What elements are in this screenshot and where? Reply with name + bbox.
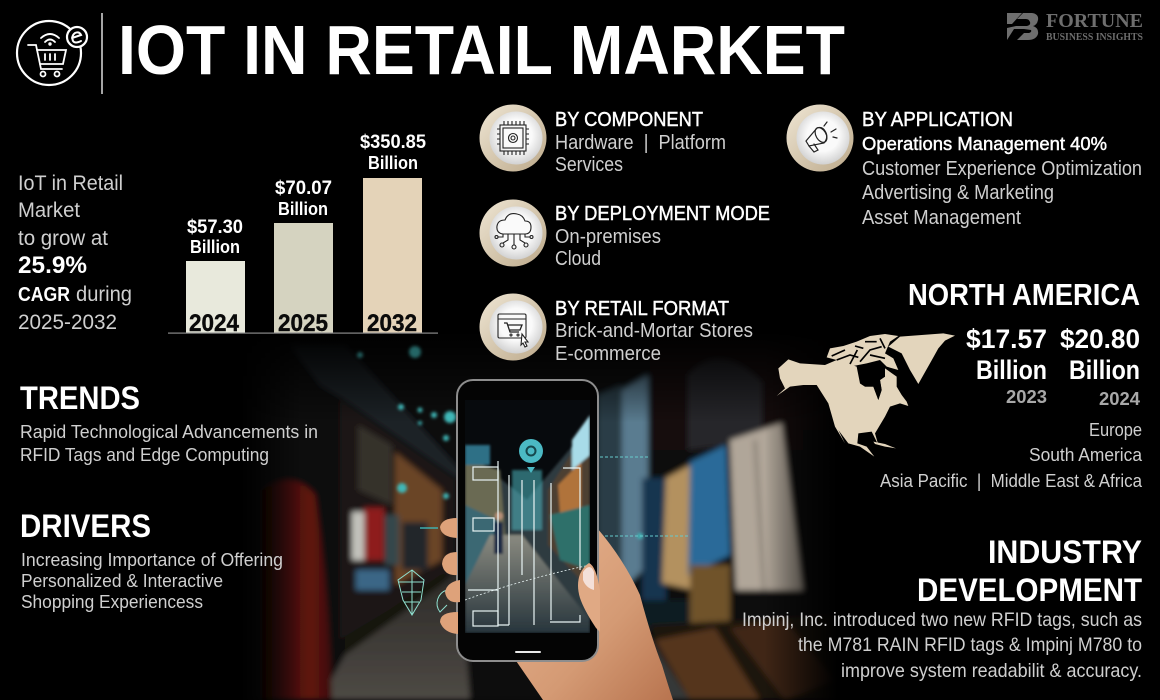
segment: by application: Operations Management 40%: [862, 133, 1107, 154]
market value 2024: [1060, 324, 1140, 409]
drivers: Increasing Importance of Offering: [21, 550, 283, 570]
phone home bar: [515, 651, 541, 653]
segment: by component: Hardware | Platform: [555, 132, 726, 154]
CAGR text block: 25.9%: [18, 252, 87, 279]
segment: by retail format: E-commerce: [555, 343, 661, 365]
trends: RFID Tags and Edge Computing: [20, 444, 269, 465]
segment: by deployment mode: On-premises: [555, 226, 661, 248]
hand palm behind phone: [512, 520, 673, 700]
market value 2023: $17.57: [966, 324, 1047, 354]
thumb: [578, 563, 600, 632]
industry development: DEVELOPMENT: [917, 572, 1142, 608]
icon: chip: [480, 104, 546, 172]
segment: by deployment mode: [480, 200, 770, 270]
industry development: improve system readabilit & accuracy.: [841, 660, 1142, 682]
drivers: Personalized & Interactive: [21, 571, 223, 591]
segment: by application: Asset Management: [862, 207, 1021, 229]
bar 2032: Billion: [368, 152, 418, 173]
bar 2024: 2024: [189, 310, 240, 337]
market value 2024: Billion: [1069, 355, 1140, 385]
AR hologram shapes: [398, 457, 690, 615]
trends: Rapid Technological Advancements in: [20, 421, 318, 442]
bar 2032: 2032: [367, 310, 417, 337]
CAGR text block: to grow at: [18, 227, 108, 250]
CAGR text block: [18, 172, 132, 334]
industry development: [742, 534, 1142, 682]
segment: by application: BY APPLICATION: [862, 109, 1013, 131]
other regions list: South America: [1029, 444, 1143, 465]
map: Greenland: [888, 333, 955, 384]
map: Hudson Bay: [860, 362, 885, 400]
other regions list: [880, 419, 1143, 491]
map: sea channels: [832, 338, 885, 364]
CAGR text block: IoT in Retail: [18, 172, 123, 195]
bar 2024: $57.30: [187, 217, 243, 238]
CAGR text block: CAGR: [18, 284, 70, 306]
bar 2025: $70.07: [275, 178, 332, 199]
segment: by application: Advertising & Marketing: [862, 182, 1054, 204]
store photo background: [262, 351, 828, 700]
bar 2025: Billion: [278, 198, 328, 219]
other regions list: Europe: [1089, 419, 1142, 440]
fingers: [440, 518, 460, 634]
icon: cloud: [480, 200, 546, 266]
logo: Fortune Business Insights: BUSINESS INSIGHTS: [1046, 31, 1143, 43]
market value 2023: Billion: [976, 355, 1047, 385]
drivers: [20, 508, 283, 612]
bar 2032: $350.85: [360, 132, 426, 153]
CAGR text block: during: [76, 283, 132, 306]
segment: by retail format: Brick-and-Mortar Stores: [555, 320, 753, 342]
header divider: [101, 13, 103, 94]
segment: by component: [480, 104, 726, 176]
icon: megaphone: [786, 104, 854, 172]
AR hologram dots: [357, 346, 643, 539]
market value 2024: $20.80: [1060, 324, 1140, 354]
map: Cuba: [873, 442, 896, 448]
bar 2024: Billion: [190, 236, 240, 257]
other regions list: Asia Pacific | Middle East & Africa: [880, 470, 1143, 491]
market value 2023: 2023: [1006, 387, 1047, 407]
drivers: Shopping Experiencess: [21, 592, 203, 612]
industry development: INDUSTRY: [988, 534, 1142, 570]
segment: by application: [786, 104, 1142, 229]
logo: Fortune Business Insights: FORTUNE: [1046, 10, 1143, 32]
phone screen scene: [465, 400, 590, 633]
CAGR text block: Market: [18, 199, 80, 222]
trends: TRENDS: [20, 380, 140, 416]
segment: by component: BY COMPONENT: [555, 109, 703, 131]
bar chart: [168, 132, 438, 337]
segment: by component: Services: [555, 154, 623, 176]
segment: by retail format: [480, 294, 753, 365]
market value 2024: 2024: [1099, 389, 1140, 409]
CAGR text block: 2025-2032: [18, 311, 117, 334]
segment: by deployment mode: BY DEPLOYMENT MODE: [555, 203, 770, 225]
bar 2025: 2025: [278, 310, 328, 337]
market value 2023: [966, 324, 1047, 407]
drivers: DRIVERS: [20, 508, 151, 544]
bar 2024: [186, 217, 245, 337]
hand thumb and fingers: [440, 518, 600, 634]
map: Arctic islands: [827, 334, 898, 370]
chart axis: [168, 332, 438, 334]
phone body: [457, 380, 598, 661]
map: North America: [777, 333, 955, 457]
bar 2032: [360, 132, 426, 337]
bar 2025: [274, 178, 333, 337]
header icon: wifi shopping cart: [17, 21, 87, 85]
title: IOT IN RETAIL MARKET: [118, 11, 845, 89]
smartphone: [457, 380, 598, 661]
trends: [20, 380, 318, 465]
AR location pin: [519, 439, 543, 463]
segment: by retail format: BY RETAIL FORMAT: [555, 298, 729, 320]
segment: by deployment mode: Cloud: [555, 248, 601, 270]
logo: Fortune Business Insights: [1007, 10, 1143, 43]
icon: browser cart: [480, 294, 546, 360]
